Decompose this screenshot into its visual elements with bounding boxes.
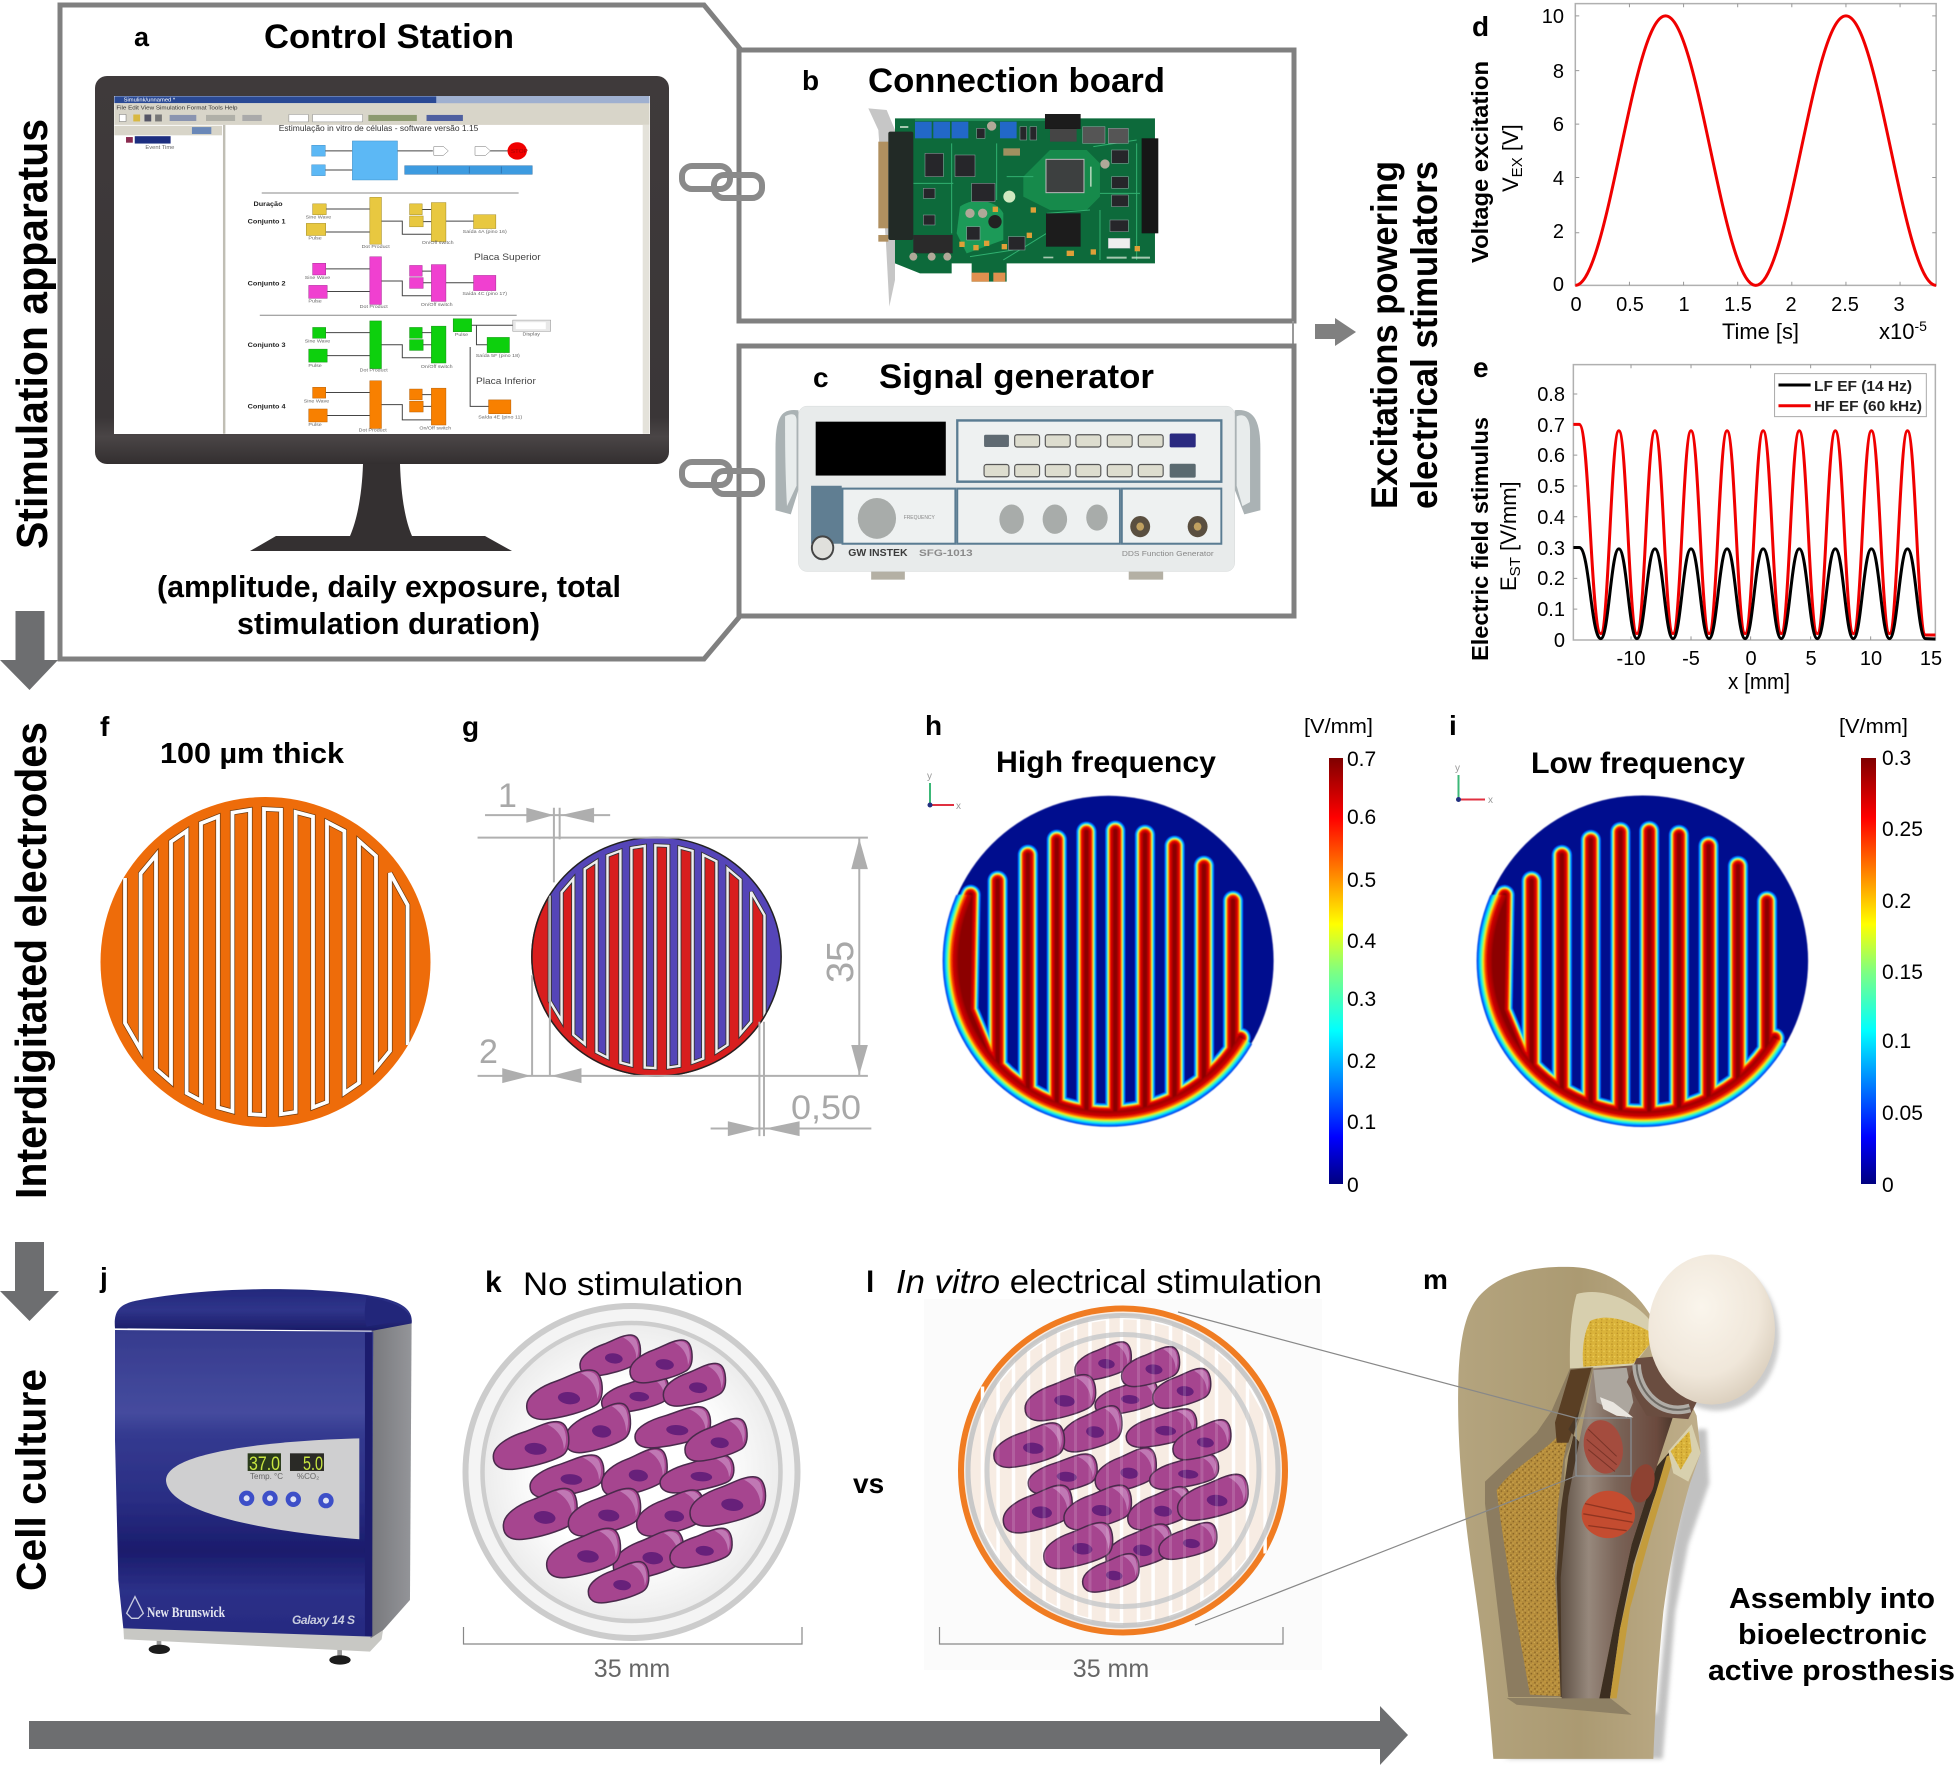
- x tick labels: [1617, 648, 1942, 670]
- colour bar labels: 0.4: [1347, 930, 1377, 953]
- scale bracket: [464, 1627, 802, 1644]
- light background: [924, 1299, 1322, 1670]
- scale label: 35 mm: [594, 1655, 670, 1683]
- section heading: Interdigitated electrodes: Interdigitated electrodes: [7, 722, 56, 1199]
- label k: k: [485, 1266, 502, 1299]
- electrode disc red and blue: [523, 837, 789, 1086]
- label vs: vs: [853, 1468, 884, 1499]
- x tick labels: 0: [1745, 648, 1757, 670]
- panel c: signal generator: [739, 346, 1294, 616]
- section heading: Stimulation apparatus: Stimulation apparatus: [8, 119, 57, 549]
- dish on electrode: [961, 1308, 1285, 1632]
- chain link: a to c: [682, 462, 762, 494]
- panel j: incubator: [99, 1262, 412, 1665]
- x tick labels: 15: [1920, 648, 1942, 670]
- caption: Assembly into bioelectronic active prosthesis: [1708, 1583, 1955, 1687]
- software screenshot: Sine Wave: [305, 339, 330, 345]
- software screenshot: Pulse: [455, 332, 468, 338]
- colour bar labels: [1347, 748, 1377, 1197]
- y tick labels: 8: [1553, 61, 1564, 83]
- cell cluster: [994, 1342, 1248, 1592]
- unit: [V/mm]: [1839, 716, 1908, 738]
- panel d: voltage chart: [1467, 4, 1936, 344]
- axes icon: [927, 771, 961, 812]
- software screenshot: Sine Wave: [306, 215, 331, 220]
- petri dish: [466, 1306, 798, 1638]
- colour bar labels: 0.2: [1347, 1050, 1376, 1073]
- electrode disc: [100, 797, 430, 1127]
- y tick labels: 2: [1553, 221, 1564, 243]
- icon: function generator device: FREQUENCY: [904, 515, 935, 521]
- incubator display readouts: [249, 1454, 323, 1475]
- panel l: in vitro electrical stimulation: [866, 1263, 1322, 1683]
- dimension labels: 0,50: [791, 1089, 861, 1127]
- software screenshot: On/Off switch: [421, 364, 453, 370]
- software screenshot: Saída 4C (pino 17): [462, 291, 507, 297]
- incubator panel captions: [250, 1472, 319, 1481]
- colour bar labels: 0: [1347, 1174, 1359, 1197]
- y tick labels: 6: [1553, 114, 1564, 136]
- x tick labels: 1: [1678, 294, 1690, 316]
- caption: amplitude, exposure, duration: (amplitude, daily exposure, total: [157, 569, 621, 604]
- illustration: hip prosthesis in femur: [1458, 1255, 1779, 1759]
- heading: In vitro electrical stimulation: In vitro electrical stimulation: [896, 1263, 1322, 1300]
- software screenshot: Pulse: [308, 236, 322, 241]
- caption: Assembly into bioelectronic active prosthesis: bioelectronic: [1738, 1619, 1927, 1651]
- x tick labels: -10: [1617, 648, 1645, 670]
- software screenshot: Dot Product: [362, 244, 390, 250]
- software screenshot: Simulink/unnamed *: [124, 98, 176, 103]
- software screenshot: Dot Product: [359, 428, 387, 433]
- icon: function generator device: DDS Function Generator: [1122, 549, 1214, 558]
- caption: amplitude, exposure, duration: stimulation duration): [237, 606, 540, 641]
- panel i: low frequency field map: [1449, 710, 1923, 1197]
- x tick labels: 5: [1805, 648, 1817, 670]
- label g: g: [462, 711, 479, 742]
- label j: j: [99, 1262, 108, 1293]
- incubator display readouts: 5.0: [303, 1454, 323, 1475]
- colour bar labels: 0.1: [1882, 1030, 1911, 1053]
- panel e: electric field chart: [1467, 352, 1942, 694]
- x tick labels: 2.5: [1831, 294, 1859, 316]
- axes icon: x: [956, 801, 961, 812]
- incubator panel captions: Temp. °C: [250, 1472, 283, 1481]
- arrow: down to electrodes: [0, 611, 58, 690]
- panel a: control station: [60, 5, 741, 659]
- y tick labels: 0.3: [1537, 538, 1565, 560]
- y tick labels: [1542, 6, 1564, 296]
- software screenshot: File Edit View Simulation Format Tools Help: [116, 106, 238, 112]
- dimension lines and arrows: [478, 808, 871, 1136]
- x tick labels: 2: [1785, 294, 1797, 316]
- y axis title: electric field stimulus: Electric field stimulus: [1467, 417, 1493, 661]
- connector between b and c: [1292, 321, 1294, 345]
- y tick labels: 0.5: [1537, 476, 1565, 498]
- software screenshot: Saída 5F (pino 18): [476, 353, 520, 359]
- heading: Excitations powering electrical stimulators: Excitations powering: [1364, 161, 1405, 509]
- panel f: orange electrode: [100, 711, 430, 1127]
- software screenshot: Placa Superior: [474, 253, 542, 263]
- scale bracket: [940, 1627, 1283, 1644]
- arrow: down to cell culture: [0, 1242, 59, 1321]
- software screenshot: Saída 4E (pino 11): [478, 415, 523, 420]
- colour bar labels: 0.1: [1347, 1111, 1376, 1134]
- panel g: dimensioned electrode drawing: [462, 711, 871, 1136]
- heading: Low frequency: Low frequency: [1531, 747, 1745, 780]
- software screenshot: Event Time: [145, 145, 174, 151]
- y tick labels: 10: [1542, 6, 1564, 28]
- heading: 100 µm thick: 100 µm thick: [160, 738, 345, 770]
- plot d axes and sine curve: [1575, 4, 1936, 285]
- y tick labels: 0.2: [1537, 568, 1565, 590]
- icon: incubator: [115, 1289, 412, 1665]
- dimension labels: [479, 777, 862, 1127]
- label h: h: [925, 710, 942, 741]
- unit: [V/mm]: [1304, 716, 1373, 738]
- caption: amplitude, exposure, duration: [157, 569, 621, 641]
- axes icon: x: [1488, 795, 1493, 806]
- software screenshot: STOP: [511, 149, 528, 155]
- axes icon: y: [927, 771, 932, 782]
- y tick labels: 0: [1554, 630, 1565, 652]
- y axis unit: VEX [V]: EX: [1509, 157, 1526, 177]
- y tick labels: 0: [1553, 274, 1564, 296]
- label d: d: [1472, 11, 1489, 42]
- label a: a: [134, 22, 150, 52]
- software screenshot: Duração: [253, 201, 282, 208]
- colour bar labels: 0: [1882, 1174, 1894, 1197]
- x tick labels: 10: [1860, 648, 1882, 670]
- caption: Assembly into bioelectronic active prosthesis: Assembly into: [1729, 1583, 1935, 1615]
- label e: e: [1473, 352, 1489, 383]
- arrow: to excitations: [1315, 318, 1356, 346]
- panel b: connection board: [739, 50, 1294, 321]
- software screenshot: Display: [523, 332, 540, 338]
- panel c frame: [739, 346, 1294, 616]
- legend labels: [1814, 378, 1922, 415]
- software screenshot: On/Off switch: [421, 302, 453, 308]
- caption: Assembly into bioelectronic active prosthesis: active prosthesis: [1708, 1655, 1955, 1687]
- software screenshot: On/Off switch: [419, 426, 451, 431]
- plot e axes and curves: [1573, 365, 1935, 640]
- software screenshot: Pulse: [308, 422, 322, 428]
- y axis unit: EST [V/mm]: ST: [1507, 557, 1524, 576]
- software screenshot: Conjunto 1: [248, 219, 286, 225]
- colour bar labels: 0.7: [1347, 748, 1376, 771]
- label m: m: [1423, 1264, 1448, 1295]
- panel b frame: [739, 50, 1294, 321]
- software screenshot: Pulse: [308, 299, 322, 304]
- software screenshot: Conjunto 3: [248, 342, 286, 349]
- zoom inset box: [1576, 1418, 1631, 1476]
- heading: High frequency: High frequency: [996, 746, 1216, 779]
- software screenshot: Conjunto 2: [248, 281, 286, 287]
- colour bar labels: 0.05: [1882, 1102, 1923, 1125]
- colour bar labels: 0.25: [1882, 818, 1923, 841]
- y axis unit: VEX [V]: V: [1498, 177, 1523, 192]
- section heading: Cell culture: Cell culture: [8, 1369, 54, 1591]
- icon: function generator device: SFG-1013: [919, 548, 973, 558]
- arrow: progression along the bottom: [29, 1706, 1408, 1765]
- y axis title: voltage excitation: Voltage excitation: [1467, 61, 1493, 263]
- y axis unit: EST [V/mm]: E: [1496, 576, 1521, 591]
- incubator panel captions: %CO₂: [297, 1472, 319, 1481]
- x axis multiplier: -5: [1914, 318, 1927, 334]
- label l: l: [866, 1266, 874, 1299]
- heading: Excitations powering electrical stimulators: electrical stimulators: [1404, 161, 1445, 509]
- heading: No stimulation: No stimulation: [523, 1266, 743, 1302]
- software screenshot: On/Off switch: [422, 240, 454, 246]
- model text: Galaxy 14 S: [292, 1613, 355, 1627]
- cell cluster: [493, 1335, 766, 1603]
- software screenshot: Pulse: [308, 363, 322, 369]
- incubator display readouts: 37.0: [249, 1454, 280, 1475]
- x tick labels: 3: [1893, 294, 1905, 316]
- zoom connector lines: [1178, 1312, 1576, 1625]
- label i: i: [1449, 710, 1457, 741]
- label f: f: [100, 711, 110, 742]
- software screenshot: Sine Wave: [304, 399, 329, 404]
- x axis title: Time [s]: Time [s]: [1722, 319, 1799, 344]
- heading: Excitations powering electrical stimulators: [1364, 161, 1445, 509]
- heading: Connection board: Connection board: [868, 62, 1165, 100]
- axes icon: [1455, 763, 1493, 806]
- colour bar labels: 0.5: [1347, 869, 1376, 892]
- software screenshot: Saída 4A (pino 16): [463, 229, 507, 235]
- panel k: no stimulation dish: [464, 1266, 802, 1683]
- y axis unit: VEX [V]: [V]: [1498, 124, 1523, 157]
- icon: circuit board: [868, 108, 1158, 307]
- colour bar: [1329, 758, 1343, 1184]
- colour bar labels: 0.3: [1347, 988, 1376, 1011]
- x tick labels: -5: [1682, 648, 1700, 670]
- software screenshot: Sine Wave: [305, 275, 330, 281]
- legend labels: HF EF (60 kHz): [1814, 398, 1922, 415]
- axes icon: y: [1455, 763, 1460, 774]
- software screenshot: Placa Inferior: [476, 376, 537, 387]
- y tick labels: 0.6: [1537, 445, 1565, 467]
- colour bar labels: 0.2: [1882, 890, 1911, 913]
- software screenshot: Estimulação in vitro de células - software versão 1.15: [279, 124, 479, 133]
- panel h: high frequency field map: [925, 710, 1377, 1197]
- dimension labels: 35: [820, 941, 862, 983]
- x axis title: x [mm]: x [mm]: [1728, 669, 1790, 694]
- colour bar labels: 0.6: [1347, 806, 1376, 829]
- monitor: [95, 76, 669, 551]
- colour bar: [1861, 758, 1876, 1184]
- electrode lines seen through cells: [996, 1341, 1249, 1592]
- icon: function generator device: [775, 406, 1260, 580]
- software screenshot: Conjunto 4: [248, 404, 286, 410]
- x axis multiplier: x10: [1879, 319, 1914, 344]
- y tick labels: [1537, 384, 1565, 652]
- colour bar labels: 0.15: [1882, 961, 1923, 984]
- scale label: 35 mm: [1073, 1655, 1149, 1683]
- y tick labels: 0.1: [1537, 599, 1565, 621]
- heading: Control Station: Control Station: [264, 18, 514, 56]
- heading: Signal generator: Signal generator: [879, 358, 1154, 396]
- colour bar labels: 0.3: [1882, 747, 1911, 770]
- legend labels: LF EF (14 Hz): [1814, 378, 1912, 395]
- field disc: [1477, 795, 1809, 1127]
- y tick labels: 0.8: [1537, 384, 1565, 406]
- y axis unit: EST [V/mm]: [V/mm]: [1496, 481, 1521, 557]
- y tick labels: 0.7: [1537, 415, 1565, 437]
- field disc: [943, 795, 1275, 1127]
- chain link: a to b: [682, 166, 762, 198]
- label b: b: [802, 65, 819, 96]
- x tick labels: 1.5: [1724, 294, 1752, 316]
- software screenshot: Dot Product: [360, 368, 388, 374]
- label c: c: [813, 362, 829, 393]
- dimension labels: 2: [479, 1033, 498, 1071]
- x tick labels: 0.5: [1616, 294, 1644, 316]
- dimension labels: 1: [498, 777, 517, 815]
- panel m: active prosthesis: [1178, 1255, 1955, 1759]
- software screenshot: Dot Product: [360, 304, 388, 310]
- y tick labels: 0.4: [1537, 507, 1565, 529]
- software screenshot: [114, 96, 649, 434]
- colour bar labels: [1882, 747, 1923, 1197]
- brand text: New Brunswick: [147, 1605, 226, 1621]
- panel a frame: [60, 5, 741, 659]
- x tick labels: 0: [1570, 294, 1582, 316]
- y tick labels: 4: [1553, 168, 1564, 190]
- x tick labels: [1570, 294, 1905, 316]
- icon: function generator device: GW INSTEK: [848, 548, 908, 559]
